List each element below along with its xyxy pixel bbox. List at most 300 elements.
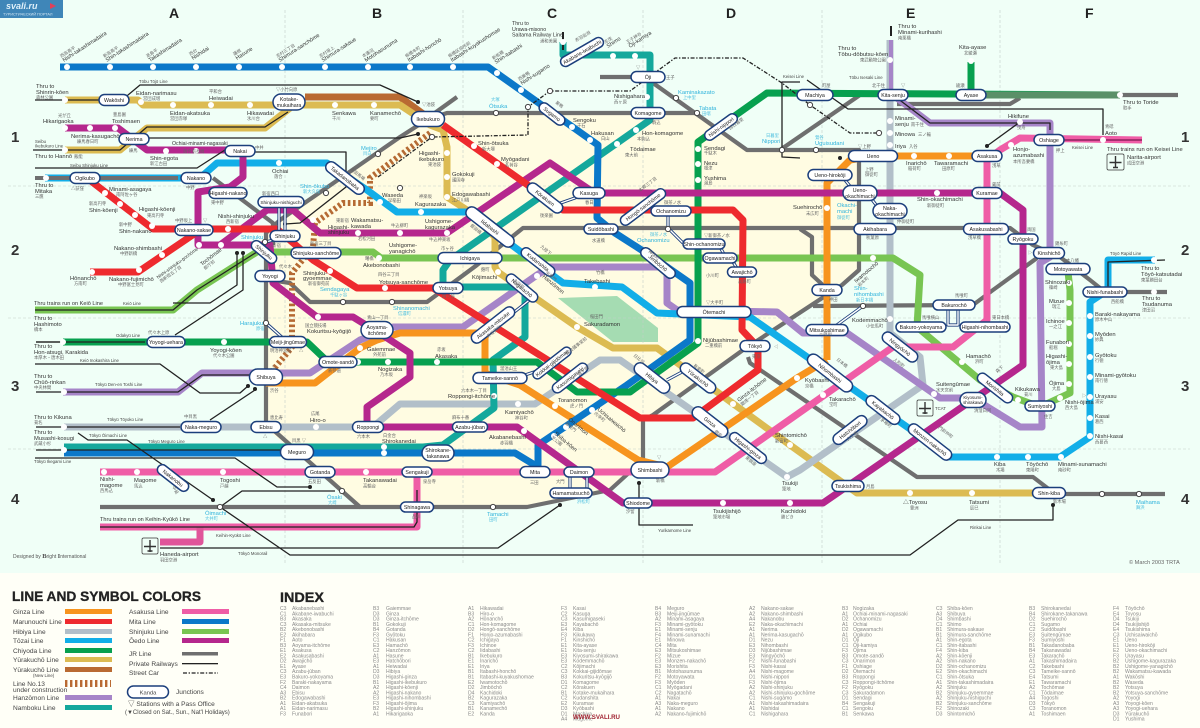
index column 4: E1 [561,648,567,654]
station labels: top Mita line: 志村坂上 [318,44,336,59]
grid column letters: D [726,5,736,21]
station labels: top Mita line: 本郷三丁目 [637,175,658,194]
index column 3: A2 [468,617,474,623]
station labels: area A and B north: Higashi-kōenji [139,207,175,213]
index column 3: Ichigaya [480,638,499,644]
station labels: top Mita line: 板橋区役所前 [447,39,473,59]
station labels: top Mita line: Nishi-takashimadaira [62,30,109,64]
index column 5: Mita [667,643,677,649]
station labels: area E and F: Keisei Line [1072,145,1094,150]
station labels: area E and F: Minami-sunamachi [1058,462,1107,468]
index column 3: A1 [468,606,474,612]
station labels: top Mita line: Shimo [606,36,622,50]
index column 6: Nezu [761,638,773,644]
index column 6: F2 [749,659,755,665]
Oji [631,72,665,82]
station labels: area E and F: Kasai [1095,414,1110,420]
index column 3: B1 [468,653,474,659]
Ikebukuro stub [425,97,457,120]
station labels: area C and D north: 東大前 [625,152,639,158]
station labels: area C and D north: 新大塚 [482,146,496,152]
index column 1: Ayase [292,664,306,670]
station labels: area A and B north: 国立競技場 [305,322,327,329]
index column 5: Myōgadani [667,685,692,691]
station labels: area A and B south: 桜田門 [590,313,603,320]
index column 8: Shinjuku-nishiguchi [947,696,991,702]
station labels: area A and B south: Thru to [34,430,52,436]
Chiyoda Ayase branch [968,62,974,90]
station labels: area E and F: 南行徳 [1095,377,1109,384]
legend rows right: Shinjuku Line [129,629,169,636]
index column 1: E2 [280,632,286,638]
station labels: area A and B south: 溜池山王 [500,365,518,372]
station labels: area C and D north: Suehirochō [793,205,822,211]
Suidobashi [584,224,618,234]
station labels: top Mita line: 飯田橋 [469,222,484,236]
station labels: area E and F: Shinozaki [1045,280,1070,286]
Kasumigaseki [550,361,590,395]
index column 7: D1 [842,638,849,644]
Ikebukuro [412,112,444,126]
index column 5: B3 [655,611,661,617]
index column 9: C3 [1029,706,1036,712]
Kinshicho: Kinshichō [1038,251,1061,257]
station labels: area A and B north: yanagichō [389,249,415,255]
Bakurocho [933,300,975,310]
index column 4: Kokkai-gijidōmae [573,669,612,675]
index column 3: Kachidoki [480,690,502,696]
station labels: top Mita line: 半蔵門 [544,269,558,283]
station labels: top Mita line: 岩本町 [856,274,871,288]
Naka-okachimachi: okachimachi [875,212,905,218]
station labels: area E and F: Tōyō Rapid Line [1110,251,1142,256]
index column 2: Hanzōmon [386,648,411,654]
station labels: area A and B north: 明治神宮前 [270,347,292,354]
station labels: area A and B south: Keiō Line [123,301,142,306]
station labels: top Mita line: 王子神谷 [625,30,643,45]
station labels: area C and D north: Higashi- [419,151,440,157]
index column 6: E3 [749,653,755,659]
station labels: area E and F: Keisei Line [783,74,805,79]
index column 1: C4 [280,685,287,691]
station labels: area E and F: 木場 [996,466,1005,474]
legend rows right: Ōedo Line [129,637,160,645]
station labels: area A and B north: Shin-kōenji [89,208,118,214]
station labels: area A and B south: Hiro-o [310,418,326,424]
station labels: area C and D north: Urawa-misono [512,27,546,33]
station labels: area E and F: 葛西 [1095,418,1104,425]
station labels: area A and B south: 新橋 [656,477,665,484]
station labels: area A and B north: 豊島園 [113,111,126,118]
index column 6: D1 [749,675,756,681]
Mita line [60,67,690,467]
watermark: www.svali.ru: WWW.SVALI.RU [573,714,620,721]
index column 7: A1 [842,611,848,617]
station labels: top Mita line: Ōji-kamiya [627,29,654,50]
Sumiyoshi [1025,401,1055,411]
station labels: area A and B north: 乃木坂 [380,371,394,378]
station labels: area E and F: Thru to [898,24,916,30]
index column 10: Yoyogi [1125,696,1140,702]
icon: plane Narita [1107,154,1124,170]
station labels: area E and F: 両国 [1027,227,1036,233]
station labels: area E and F: 大島 [1052,385,1061,392]
index column 8: Shin-kōenji [947,653,972,659]
grid row numbers: 1 [1181,129,1189,146]
station labels: top Mita line: Itabashi-kuyakushomae [450,27,502,64]
station labels: area C and D north: 御茶ノ水 [664,199,682,206]
station labels: area A and B north: Shinjuku [241,235,263,241]
index column 9: E3 [1029,632,1035,638]
station labels: area C and D north: 上野 [865,167,874,172]
station labels: area C and D north: 水道橋 [592,237,606,244]
station labels: area E and F: Maihama [1136,500,1160,506]
Shirokane-takanawa: Shirokane- [425,448,451,454]
index column 7: D2 [842,627,849,633]
station labels: top Mita line: 内幸町 [593,410,607,424]
index column 9: E3 [1029,653,1035,659]
station labels: area C and D north: 竹橋 [596,269,605,276]
station labels: area A and B south: Magome [134,478,157,484]
station labels: top Mita line: 高島平 [145,46,160,59]
station labels: area A and B south: Tōkyū Meguro Line [148,439,185,444]
index column 9: Suidōbashi [1041,627,1066,633]
station labels: top Mita line: 銀座一丁目 [739,389,760,408]
index column 6: Nishi-shinjuku [761,685,793,691]
station labels: area C and D north: 後楽園 [540,212,553,219]
Ogikubo: Ogikubo [75,176,95,182]
index column 9: A1 [1029,711,1035,717]
index column 6: Nakanobu [761,617,784,623]
index column 2: B1 [373,680,379,686]
station labels: area E and F: 浅草 [992,162,1001,169]
Ryogoku [1008,234,1038,244]
icon: plane TCAT [917,400,933,416]
station labels: area A and B south: Musashi-kosugi [34,436,74,442]
station labels: area C and D north: Okachi- [837,203,857,209]
station labels: area A and B north: 神楽坂 [419,193,433,200]
inner area of the JR loop line [266,113,859,507]
station labels: area A and B south: 東京 [752,353,761,360]
station labels: area A and B north: Thru to [36,84,54,90]
index column 8: A1 [936,638,942,644]
index column 6: Nishi-shinjuku-gochōme [761,690,816,696]
station labels: area A and B north: Harajuku [240,321,263,327]
index column 7: F2 [842,685,848,691]
legend station symbol [125,700,230,716]
Kayabacho [864,393,902,427]
index column 6: F3 [749,664,755,670]
station labels: area C and D north: Ōtsuka [489,103,508,110]
station labels: area C and D north: 末広町 [806,210,820,217]
Tobu core [893,95,1050,130]
station labels: area A and B south: 虎ノ門 [570,402,583,410]
Morishita [975,371,1015,405]
Otemachi: Ōtemachi [703,309,725,316]
index column 10: E1 [1113,638,1119,644]
Sugamo: Sugamo [542,106,561,123]
Wakoshi [99,94,129,106]
station labels: area C and D north: Kōjimachi [472,275,497,281]
Shibuya [250,369,282,385]
index column 3: Kagurazaka [480,696,507,702]
Nagatacho: Nagatachō [510,278,533,299]
index column 2: D3 [373,617,380,623]
Ueno: Ueno [867,154,879,160]
index column 8: Shintomichō [947,711,975,717]
station labels: area C and D north: Takebashi [584,279,610,285]
station labels: area A and B north: Nakano-shimbashi [114,246,162,252]
Higashi-ginza: Higashi-ginza [733,437,762,461]
Nishi-funabashi [1083,287,1127,297]
Roppongi: Roppongi [357,425,379,431]
station labels: area A and B north: 営団赤塚 [170,115,188,122]
index column 10: Yotsuya [1125,685,1143,691]
index column 3: Jimbōchō [480,685,502,691]
legend: line and symbol colors [12,588,230,716]
index column 7: Omote-sandō [853,653,884,659]
index column 6: D1 [749,638,756,644]
index column 10: B2 [1113,659,1119,665]
station labels: area A and B south: Nijūbashimae [703,338,738,344]
index column 8: C1 [936,675,943,681]
station labels: area A and B north: 中野富士見町 [118,281,144,288]
line 13 under construction [273,133,430,370]
station labels: area A and B north: 千駄ヶ谷 [330,292,348,298]
station labels: area A and B north: 四ツ谷 [442,293,456,300]
station labels: area E and F: 蔵前 [992,181,1001,188]
index column 8: B1 [936,627,942,633]
station labels: area C and D north: Shin- [854,286,868,292]
grid column letters: B [372,5,382,21]
index column 3: B3 [468,611,474,617]
station labels: area A and B north: 新宿三丁目 [310,240,331,247]
Yurikamome [639,483,693,525]
Meiji-jingumae: Meiji-jingūmae [271,340,305,346]
station labels: area E and F: 水天宮前 [936,386,954,394]
station labels: area E and F: ▷ [1082,393,1087,398]
index column 9: Takebashi [1041,664,1064,670]
legend rows left: Tōzai Line [13,638,44,645]
Kotake-mukaihara: Kotake- [280,97,298,103]
Korakuen [525,181,565,215]
station labels: area A and B south: Ōimachi [205,511,226,517]
index column 3: Ichinoe [480,643,497,649]
station labels: area E and F: 東日本橋 [992,314,1010,321]
index column 2: A1 [373,711,379,717]
station labels: top Mita line: Nishidai [191,46,211,62]
index column 4: Kiba [573,627,583,633]
grid row numbers: 3 [1181,378,1189,395]
station labels: area C and D north: 大塚 [491,96,500,103]
station labels: area A and B south: Sakuradamon [584,322,620,328]
Ginza: Ginza [702,416,717,429]
station labels: area C and D north: Nezu [704,161,718,167]
Keisei box [782,82,800,158]
Ogikubo [70,172,100,184]
station labels: area A and B south: Tōkyō Monorail [238,551,267,556]
index column 9: Toranomon [1041,706,1067,712]
index column 3: Hikawadai [480,606,504,612]
index column 9: Tawaramachi [1041,680,1071,686]
station labels: area E and F: 綾瀬 [956,82,965,89]
station labels: area A and B south: Keiō Inokashira Line [80,358,120,363]
legend junction symbol [128,686,205,698]
index column 7: C3 [842,659,849,665]
station labels: area C and D north: 千石 [577,122,586,129]
grid row numbers: 2 [1181,242,1189,259]
Chuo line [213,178,273,245]
Gotanda [305,466,335,478]
station labels: area A and B south: Thru to [34,374,52,380]
Hibiya [632,360,672,396]
index column 3: Iidabashi [480,648,500,654]
index column 3: Itabashi-honchō [480,669,516,675]
Omote-sando: Omote-sandō [322,360,354,366]
index column 7: D2 [842,669,849,675]
station labels: area E and F: Thru to [1141,266,1159,272]
station labels: area A and B south: Tōkyū Den-en Toshi Line [95,382,143,387]
station labels: area E and F: 稲荷町 [908,165,922,172]
Shinagawa: Shinagawa [404,505,430,511]
index column 4: E3 [561,622,567,628]
index column 7: Ōji [853,637,859,644]
Odakyu east [175,253,243,335]
index column 1: A3 [280,690,286,696]
junction links [262,180,958,490]
station labels: area E and F: Funabori [1046,340,1069,346]
grid column letters [169,5,1094,21]
Asakusa [972,150,1002,162]
station labels: top Mita line: Iwamotochō [853,261,880,285]
index column 5: E3 [655,664,661,670]
station labels: area A and B north: Kanamechō [370,111,401,117]
index column 9: Takadanobaba [1041,643,1075,649]
index column 3: Honjo-azumabashi [480,632,522,638]
station labels: area E and F: 錦糸町 [1055,240,1069,247]
index column 4: E3 [561,653,567,659]
Takadanobaba: Takadanobaba [329,166,360,192]
station labels: area E and F: Minami-gyōtoku [1095,373,1136,379]
station labels: area E and F: Hikifune [1008,114,1029,120]
station labels: area A and B north: △新宿 [268,242,281,249]
station labels: area C and D north: Nippori [762,139,780,145]
Kuramae: Kuramae [976,191,998,197]
legend rows right: Mita Line [129,619,156,626]
station labels: area A and B north: Ushigome- [389,243,417,249]
Tsukishima: Tsukishima [835,484,861,490]
station labels: area C and D north: 千駄木 [704,150,718,156]
index column 7: B3 [842,653,848,659]
index column 5: Monzen-nakachō [667,659,706,665]
index column 9: C1 [1029,622,1036,628]
station labels: area A and B south: 築地市場 [713,514,731,520]
station labels: area A and B north: 代々木 [279,263,293,270]
index column 5: F2 [655,653,661,659]
Machiya [797,90,833,100]
index column 3: D2 [468,685,475,691]
Higashi-nihombashi: Higashi-nihombashi [962,325,1008,331]
station labels: area A and B north: kawada [351,224,372,230]
station labels: top Mita line: Shin-takashimadaira [105,31,151,64]
Chiyoda line [63,93,1120,392]
Gotanda: Gotanda [310,470,330,476]
station labels: top Mita line: 茅場町 [879,416,894,430]
station labels: area A and B south: 品川 [412,514,421,520]
station labels: area E and F: Tsudanuma [1142,302,1173,308]
station labels: area E and F: 東葉勝田台 [1141,276,1163,284]
Chuo Sobu line [270,228,1167,302]
station labels: area A and B south: Shintomichō [775,433,807,439]
index column 3: Kanda [480,711,495,717]
index column 3: Hōnanchō [480,617,503,623]
station labels: area E and F: Nishi-kasai [1095,434,1123,440]
Daimon [564,467,594,477]
Naka-meguro [181,422,221,432]
station labels: area A and B south: Yurikamome Line [658,528,692,533]
index column 8: A2 [936,685,942,691]
index column 2: A1 [373,653,379,659]
Monzen-nakacho: Monzen-nakachō [912,428,947,458]
index column 1: Akebonobashi [292,627,324,633]
station labels: area A and B south: Togoshi [220,478,240,484]
index column 3: C1 [468,622,475,628]
Aoyama-itchome: Aoyama- [366,325,388,331]
index column 5: C4 [655,643,662,649]
legend rows right: Asakusa Line [129,609,169,616]
Yamanote loop [266,113,697,425]
station labels: area A and B south: Designed by Bright International [13,553,86,560]
index column 4: Kōrakuen [573,685,595,691]
index column 2: Higashi-ikebukuro [386,680,427,686]
index column 2: Higashi-kōenji [386,685,418,691]
index column 3: B1 [468,669,474,675]
station labels: area C and D north: 三越前 [819,330,833,337]
index column 4: Machiya [573,711,592,717]
index column 4: F1 [561,638,567,644]
station labels: area E and F: ▽ [901,83,906,89]
station labels: area E and F: 東武動物公園 [860,56,886,64]
index column 4: F3 [561,606,567,612]
station labels: area A and B south: Yoyogi-kōen [210,348,242,354]
index column 7: A1 [842,622,848,628]
Kasumigaseki: Kasumigaseki [556,366,585,391]
station labels: area C and D north: machi [837,209,852,215]
station labels: area E and F: ▷ [1028,250,1033,255]
station labels: area A and B north: Toshimaen [112,119,140,125]
Nihombashi [805,352,855,394]
station labels: top Mita line: 門前仲町 [937,424,955,441]
station labels: area E and F: 宝町 [829,402,838,407]
station labels: area E and F: 本八幡 [1066,257,1080,264]
index column 5: Nakano [667,706,685,712]
legend rows right [129,609,229,677]
station labels: area C and D north: 茗荷谷 [505,162,519,168]
station labels: area E and F: TCAT [935,406,946,411]
station labels: area A and B north: gyoemmae [303,276,332,282]
legend rows left: Marunouchi Line [13,619,62,626]
index column 4: Kasai [573,606,586,612]
station labels: area E and F: 原木中山 [1095,316,1112,323]
index column 4: Kōjimachi [573,664,595,670]
station labels: area A and B north: 中野坂上 [175,217,193,224]
Tobu Isesaki section [893,95,1050,140]
station labels: area A and B north: ▽小竹向原 [276,86,298,93]
Omote-sando [319,356,357,368]
station labels: area E and F: Inarichō [906,161,927,167]
index column 3: C2 [468,638,475,644]
index column 2: E3 [373,659,379,665]
